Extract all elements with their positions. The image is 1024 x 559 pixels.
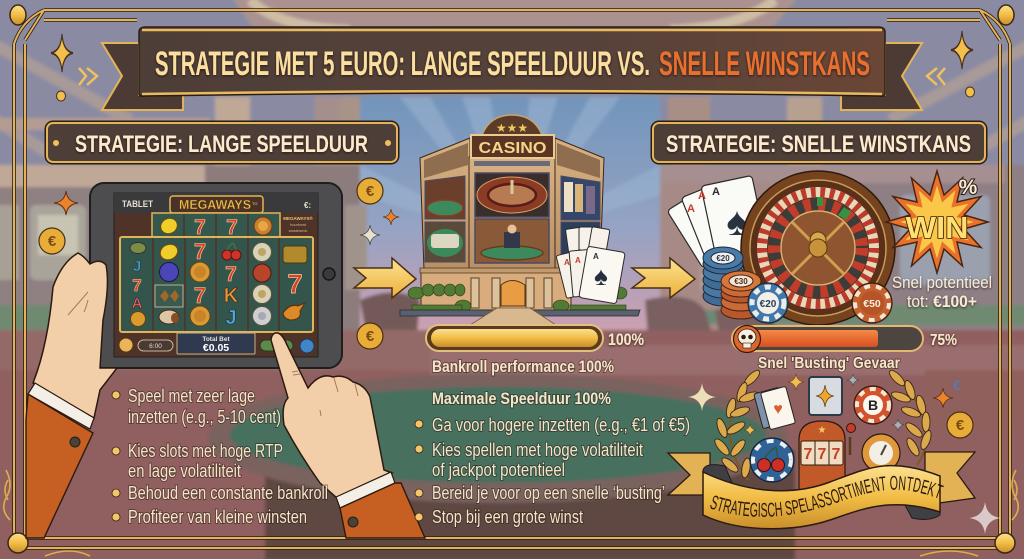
sparkle and coin decorations [54, 191, 1001, 534]
scroll ends [703, 465, 940, 519]
reel column 5 [252, 242, 272, 326]
win potential text: tot: €100+ [907, 292, 977, 311]
heading text: STRATEGIE: LANGE SPEELDUUR [75, 131, 368, 158]
right side playing cards: A [712, 186, 720, 198]
sleeve [340, 483, 425, 538]
side note: MEGAWAYS® [283, 215, 313, 221]
side note [283, 215, 313, 233]
euro coins: € [956, 417, 965, 434]
label: busting gevaar: Snel 'Busting' Gevaar [758, 355, 900, 372]
roulette wheel [741, 171, 895, 325]
bullet list: lange speelduur: Behoud een constante bankroll [128, 482, 328, 503]
front ace of spades [579, 246, 625, 304]
palm trees and bushes [408, 284, 627, 312]
sleeve [26, 394, 93, 538]
win text: WIN [906, 210, 968, 245]
icon: dice card [809, 377, 842, 415]
plaza and steps [400, 308, 640, 325]
bullet list: snelle winstkans: Stop bij een grote winst [432, 506, 583, 527]
icon: heart card: ♥ [773, 401, 783, 418]
win starburst [886, 171, 988, 273]
win potential text: Snel potentieel [892, 273, 992, 292]
front ace of spades: A [593, 252, 599, 261]
roulette window [475, 173, 549, 217]
reel column 3: 7 [194, 239, 206, 264]
chip: 20 euro: €20 [760, 299, 777, 310]
bullet list: snelle winstkans: Kies spellen met hoge volatiliteit [432, 439, 643, 460]
bullet list: lange speelduur: inzetten (e.g., 5-10 cent) [128, 406, 281, 427]
reel column 4: J [225, 307, 237, 329]
bar value: 75% [930, 332, 957, 349]
chip: 50 euro: €50 [863, 298, 881, 310]
banner curve path [709, 490, 937, 517]
side note: hourheat [290, 222, 307, 227]
scroll banner [666, 451, 976, 530]
laurel right [887, 368, 933, 465]
skull icon [734, 326, 760, 352]
scroll body [703, 466, 940, 529]
ground floor [420, 268, 575, 310]
reel column 1: J [133, 258, 141, 275]
euro coins [39, 178, 973, 438]
bullet list: lange speelduur: Kies slots met hoge RTP [128, 440, 283, 461]
bullet list: lange speelduur: Profiteer van kleine winsten [128, 506, 307, 527]
title accent text: SNELLE WINSTKANS [659, 45, 870, 83]
reel column 3: 7 [194, 283, 206, 308]
tablet with slot game [90, 183, 342, 368]
chip: 20 euro [748, 283, 788, 323]
tablet with slot game: €: [304, 201, 311, 210]
control bar [119, 333, 314, 354]
euro coins: € [48, 233, 57, 250]
chip stacks: €30 [734, 277, 748, 286]
dealer window [475, 219, 549, 263]
reel column 4 [222, 243, 241, 329]
progress bar: bankroll [426, 325, 644, 351]
euro coins: € [366, 183, 375, 200]
win potential text [892, 273, 992, 311]
right side playing cards [667, 175, 767, 268]
side note: wasteseck [289, 228, 307, 233]
megaways logo: MEGAWAYS [179, 197, 251, 212]
bullet list: lange speelduur [112, 385, 328, 527]
left hand holding tablet [26, 253, 117, 538]
center tower [469, 157, 555, 270]
reel column 6 [283, 246, 307, 320]
banner text: STRATEGISCH SPELASSORTIMENT ONTDEKT [710, 476, 944, 517]
reel column 1 [130, 242, 146, 326]
bullet list: snelle winstkans: of jackpot potentieel [432, 459, 565, 480]
wings [420, 138, 470, 270]
control bar: 6:00 [149, 343, 162, 350]
reel column 4: 7 [225, 263, 237, 286]
cuff [336, 472, 395, 508]
upper reels [152, 213, 280, 239]
title banner [102, 27, 922, 110]
front ace of spades: ♠ [594, 261, 608, 291]
right side playing cards: ♠ [726, 200, 748, 244]
bullet list: lange speelduur: en lage volatiliteit [128, 460, 241, 481]
right hand pointing [271, 333, 425, 538]
reel column 4: K [224, 285, 239, 307]
background: central window with rays [360, 97, 660, 332]
playing cards by casino: A [564, 258, 570, 267]
bullet markers [112, 391, 120, 521]
cuff [28, 383, 94, 429]
label: bankroll performance: Bankroll performance 100% [432, 357, 614, 376]
progress bar: busting danger [732, 326, 957, 352]
icon: slot machine: 7 [832, 446, 841, 463]
reel column 3 [190, 239, 210, 326]
arrow: casino to right [632, 258, 695, 298]
right side playing cards: A [687, 203, 695, 215]
reel column 2 [155, 241, 183, 324]
bullet list: snelle winstkans: Bereid je voor op een snelle ‘busting’ [432, 482, 665, 503]
reel column 1: 7 [132, 276, 142, 295]
upper reels: 7 [226, 216, 238, 239]
icon: slot machine: 7 [818, 446, 827, 463]
main reels [120, 237, 313, 332]
title text: STRATEGIE MET 5 EURO: LANGE SPEELDUUR VS. [155, 45, 650, 83]
percent sign: % [959, 176, 978, 199]
dome with stars: ★★★ [496, 121, 528, 135]
megaways logo: TO [252, 201, 257, 206]
reel column 6: 7 [287, 269, 303, 299]
sparkle and coin decorations: € [953, 377, 961, 393]
icon: slot machine: 7 [804, 446, 813, 463]
tablet label: TABLET [122, 199, 153, 210]
playing cards by casino [556, 227, 625, 304]
decorations beside title [51, 31, 974, 101]
chip: 50 euro [852, 283, 892, 323]
icon: chip B [854, 386, 892, 424]
reel column 1: A [132, 295, 143, 312]
chip stacks [703, 247, 761, 319]
heading panel: lange speelduur [46, 122, 398, 163]
upper reels: 7 [194, 216, 206, 239]
right side playing cards: A [698, 190, 706, 202]
bullet list: lange speelduur: Speel met zeer lage [128, 385, 255, 406]
casino sign [471, 135, 554, 158]
heading panel: snelle winstkans [652, 122, 986, 163]
casino sign: CASINO [478, 140, 546, 157]
laurel left [713, 368, 762, 480]
total bet value: €0.05 [203, 342, 229, 354]
icon: gauge chip [862, 434, 900, 472]
icon: heart card [754, 386, 795, 430]
left windows [425, 176, 465, 262]
dome with stars [482, 115, 542, 135]
banner tails [668, 452, 975, 505]
right windows [561, 176, 600, 262]
banner tails [102, 43, 922, 110]
frame curl ornaments [4, 470, 1018, 556]
icon: cherry chip [750, 438, 794, 482]
banner body [139, 27, 885, 96]
bullet list: snelle winstkans [415, 414, 690, 527]
arrow: left to casino [354, 258, 416, 298]
window strip [474, 161, 550, 166]
bullet list: snelle winstkans: Ga voor hogere inzetten (e.g., €1 of €5) [432, 414, 690, 435]
bullet markers [415, 420, 423, 521]
icon: chip B: B [868, 397, 878, 413]
total bet label: Total Bet [202, 336, 230, 343]
euro coins: € [366, 328, 375, 345]
playing cards by casino: A [575, 256, 581, 265]
chip stacks: €20 [716, 254, 730, 263]
bar value: 100% [608, 330, 644, 349]
label: maximale speelduur: Maximale Speelduur 100% [432, 389, 611, 408]
background: green gaming table [208, 373, 795, 559]
casino building [400, 115, 640, 325]
icon: slot machine [799, 421, 856, 493]
icon: slot machine: ★ [818, 425, 827, 436]
